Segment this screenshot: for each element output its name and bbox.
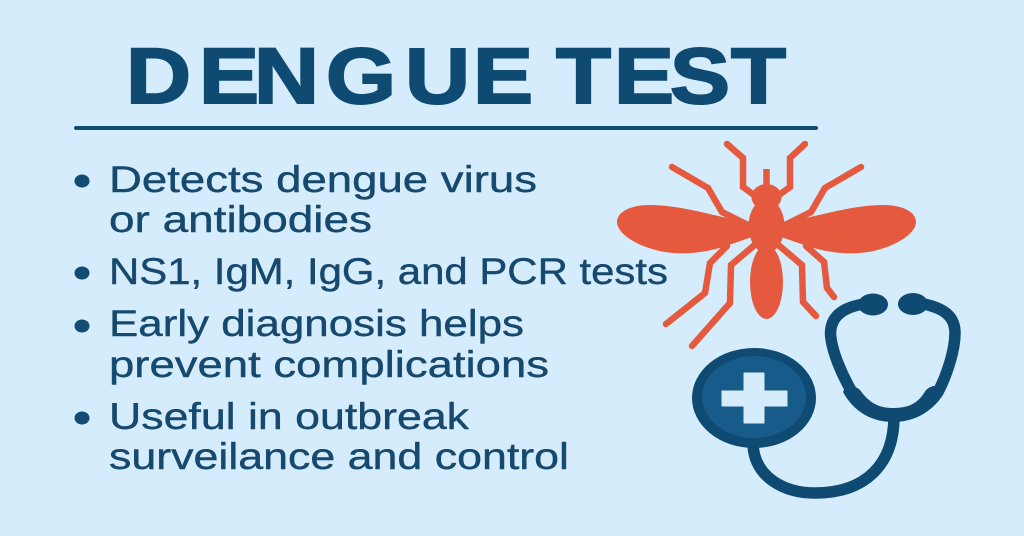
bullet: detects [74,159,537,240]
bullet: early diagnosis [74,303,549,385]
stethoscope headset [830,293,955,422]
icon: stethoscope [692,293,955,493]
bullet: early diagnosis: Early diagnosis helps [109,303,524,344]
mosquito body [752,184,782,210]
bullet: outbreak surveillance: surveilance and control [109,436,569,477]
mosquito wings [617,205,752,253]
bullet: test types: NS1, IgM, IgG, and PCR tests [109,251,668,292]
bullet list [74,159,668,477]
bullet: outbreak surveillance [74,396,569,477]
bullet: detects: or antibodies [109,199,372,240]
bullet: detects: Detects dengue virus [109,159,537,200]
mosquito legs and antennae [666,144,861,346]
bullet: early diagnosis: prevent complications [109,344,549,385]
title: DENGUE TEST [126,31,786,120]
chest piece [692,348,816,448]
icon: mosquito [617,144,916,346]
bullet: outbreak surveillance: Useful in outbreak [109,396,470,437]
stethoscope tube [753,416,894,493]
